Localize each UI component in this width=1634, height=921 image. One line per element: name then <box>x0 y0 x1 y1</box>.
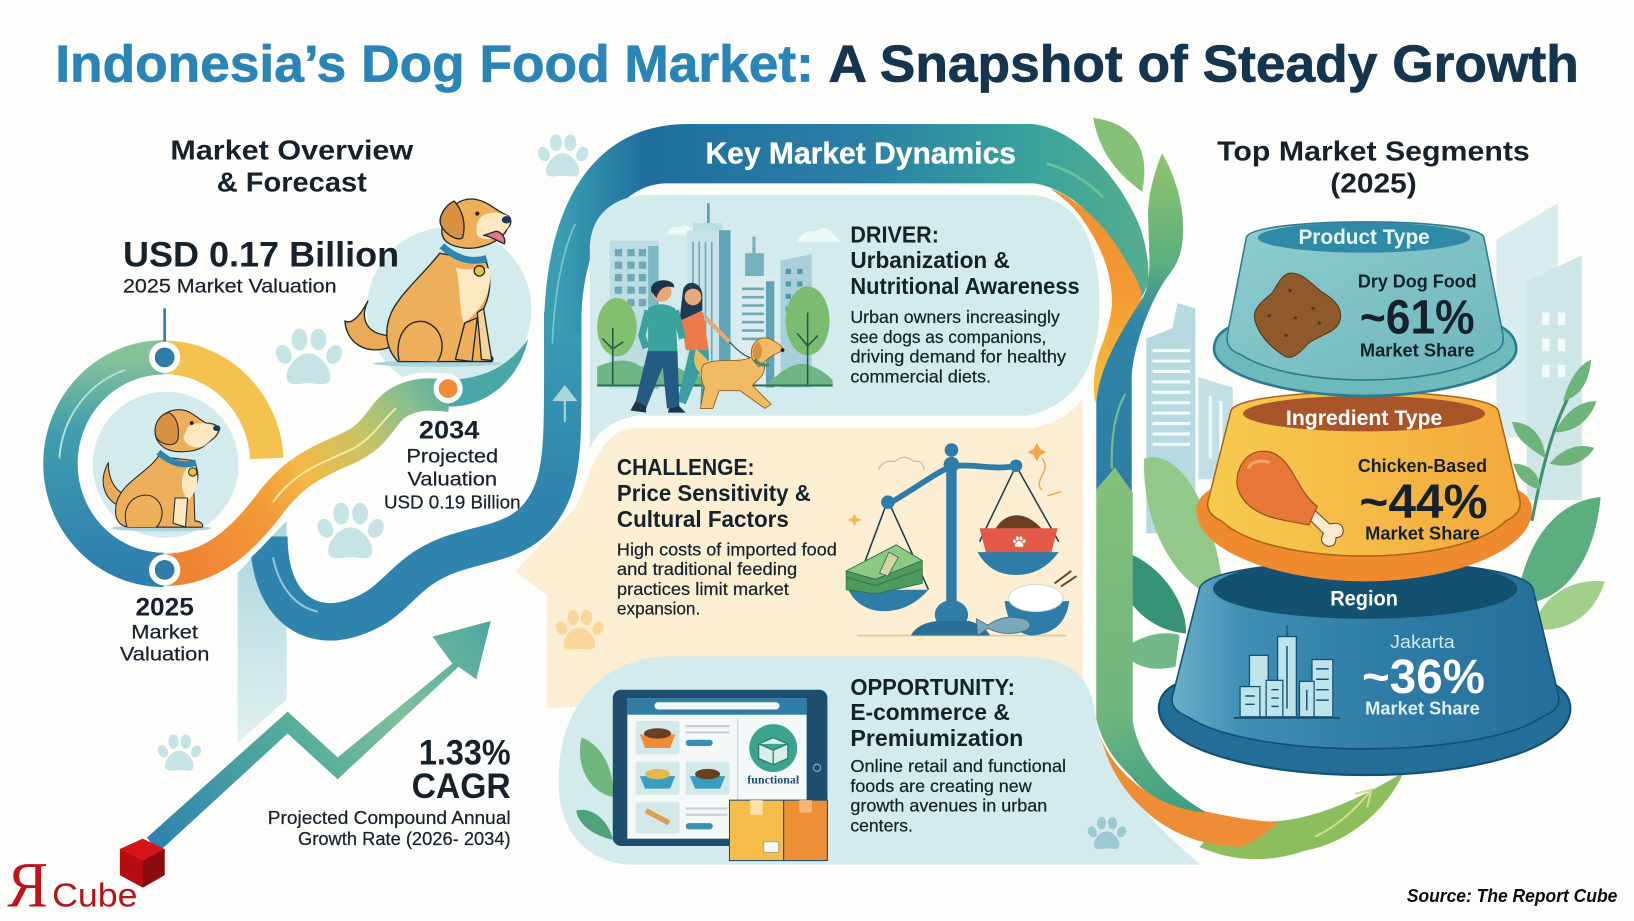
stat: CAGR: 1.33% <box>419 733 511 773</box>
icon: leaves <box>576 738 613 840</box>
label: 2034 projected valuation: Projected <box>406 446 498 468</box>
driver text: commercial diets. <box>850 366 991 386</box>
driver text: see dogs as companions, <box>850 327 1046 347</box>
challenge text: Cultural Factors <box>617 506 789 532</box>
header band: key market dynamics <box>544 124 1149 344</box>
icon: tablet: functional <box>747 772 800 786</box>
icon: chicken drumstick <box>1237 451 1343 546</box>
challenge text: and traditional feeding <box>617 559 797 579</box>
marker: 2034 <box>434 374 463 403</box>
background skyline <box>1146 203 1582 533</box>
ribbon: light green tail <box>1199 772 1404 859</box>
label: 2025 market valuation: Valuation <box>120 644 209 666</box>
ribbon: leaf stem into blue <box>1096 153 1183 493</box>
region text: Jakarta <box>1390 631 1455 652</box>
icon: adult dog <box>345 199 511 367</box>
label: 2025 market valuation: Market <box>131 622 199 644</box>
heading: market overview: Market Overview <box>170 134 413 165</box>
icon: paw <box>1086 817 1128 849</box>
label: 2034 projected valuation: Valuation <box>407 469 497 491</box>
product text: ~61% <box>1360 291 1475 344</box>
heading: market overview <box>170 134 413 198</box>
driver text: driving demand for healthy <box>850 347 1066 367</box>
arrow: ribbon up arrow <box>554 387 575 422</box>
bowl: product type <box>1214 222 1516 396</box>
ribbon: green column <box>1096 468 1207 813</box>
label: 2034 projected valuation <box>384 417 521 512</box>
ingredient text <box>1286 407 1488 544</box>
man <box>636 349 679 408</box>
product text: Dry Dog Food <box>1358 271 1477 292</box>
challenge text: practices limit market <box>617 579 789 599</box>
logo: RCube: Я <box>7 848 48 920</box>
heading: top market segments <box>1217 135 1530 199</box>
ingredient text: Chicken-Based <box>1358 455 1487 476</box>
region text: ~36% <box>1362 651 1485 704</box>
panel: driver <box>590 195 1099 448</box>
region text: Market Share <box>1365 698 1480 719</box>
product text: Product Type <box>1298 226 1430 249</box>
dog circle 2034 <box>345 199 531 406</box>
title: A Snapshot of Steady Growth <box>828 35 1579 93</box>
stat: USD 0.17 billion: USD 0.17 Billion <box>123 235 399 275</box>
marker: 2025 top <box>149 308 180 373</box>
product text <box>1298 226 1477 360</box>
stat: CAGR: CAGR <box>412 766 511 806</box>
icon: city skyline <box>1234 625 1340 718</box>
title <box>55 35 1579 93</box>
icon: puppy <box>103 410 220 531</box>
heading: market overview: & Forecast <box>217 167 367 198</box>
market valuation ring <box>59 357 267 570</box>
region text <box>1330 587 1485 719</box>
ingredient text: Ingredient Type <box>1286 407 1442 430</box>
label: 2025 market valuation: 2025 <box>135 594 194 622</box>
icon: tablet <box>613 690 827 861</box>
bowl: region <box>1159 558 1570 775</box>
marker: 2025 bottom <box>149 554 180 586</box>
challenge text: Price Sensitivity & <box>617 480 811 506</box>
walking dog <box>694 349 713 377</box>
ribbon: orange sweep <box>1099 735 1278 847</box>
opportunity text: OPPORTUNITY: <box>850 674 1015 700</box>
orange to green wave <box>164 394 450 570</box>
icon: cream paw <box>554 610 606 649</box>
label: key market dynamics: Key Market Dynamics <box>705 138 1016 171</box>
bowl: ingredient type <box>1196 392 1532 581</box>
heading: top market segments: Top Market Segments <box>1217 135 1530 166</box>
pale column <box>238 521 287 743</box>
heading: top market segments: (2025) <box>1330 168 1417 199</box>
opportunity text: centers. <box>850 815 913 835</box>
label: 2034 projected valuation: 2034 <box>419 417 479 445</box>
icon: balance scale <box>846 443 1076 636</box>
blue flow ribbon <box>269 313 563 622</box>
leash <box>729 342 759 359</box>
driver text: DRIVER: <box>850 222 939 248</box>
icon: kibble <box>1254 273 1341 357</box>
woman <box>677 349 711 404</box>
opportunity text: growth avenues in urban <box>850 796 1047 816</box>
challenge text <box>617 454 837 619</box>
leaf: top <box>1093 118 1144 192</box>
ribbon: orange to yellow <box>1050 189 1142 403</box>
logo: RCube: Cube <box>52 877 138 914</box>
driver text: Nutritional Awareness <box>850 273 1080 299</box>
panel: challenge <box>516 399 1083 708</box>
logo: RCube <box>7 839 165 920</box>
decorative leaves <box>1112 359 1605 669</box>
stat: CAGR <box>268 733 511 849</box>
opportunity text: E-commerce & <box>850 699 1010 725</box>
region text: Region <box>1330 587 1398 610</box>
opportunity text <box>850 674 1066 835</box>
label: 2034 projected valuation: USD 0.19 Billion <box>384 491 521 512</box>
challenge text: CHALLENGE: <box>617 454 754 480</box>
title: Indonesia’s Dog Food Market: <box>55 35 814 93</box>
arrow: growth <box>147 621 491 852</box>
product text: Market Share <box>1360 339 1475 360</box>
driver text: Urban owners increasingly <box>850 307 1060 327</box>
opportunity text: foods are creating new <box>850 776 1032 796</box>
opportunity text: Online retail and functional <box>850 756 1066 776</box>
ingredient text: ~44% <box>1359 476 1488 529</box>
driver text: Urbanization & <box>850 247 1010 273</box>
stat: CAGR: Growth Rate (2026- 2034) <box>298 828 511 849</box>
challenge text: expansion. <box>617 599 700 619</box>
background paw prints <box>156 135 591 771</box>
illustration: city walk <box>597 203 841 413</box>
right side flow ribbons <box>1050 118 1404 859</box>
label: 2025 market valuation <box>120 594 209 666</box>
stat: USD 0.17 billion: 2025 Market Valuation <box>123 276 337 298</box>
source note: Source: The Report Cube <box>1407 885 1617 906</box>
stat: USD 0.17 billion <box>123 235 399 298</box>
stat: CAGR: Projected Compound Annual <box>268 807 511 828</box>
panel: opportunity <box>559 656 1200 865</box>
challenge text: High costs of imported food <box>617 539 837 559</box>
driver text <box>850 222 1080 386</box>
ingredient text: Market Share <box>1365 523 1480 544</box>
opportunity text: Premiumization <box>850 725 1023 751</box>
